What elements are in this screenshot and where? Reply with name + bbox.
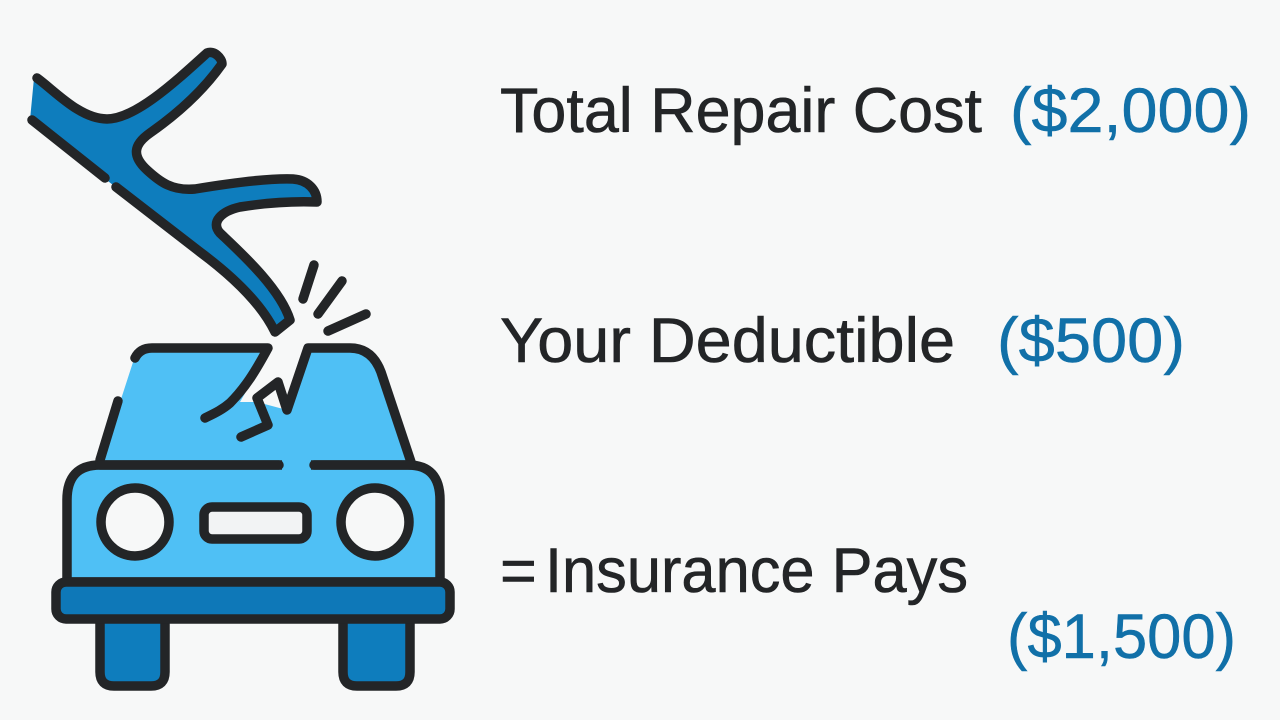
right wheel (343, 618, 410, 686)
icon: damaged car (56, 348, 450, 686)
car windshield (100, 348, 412, 464)
grille (204, 507, 307, 539)
value: repair cost amount: ($2,000) (1010, 76, 1251, 146)
value: deductible amount: ($500) (997, 306, 1185, 376)
text: insurance pays: Insurance Pays (545, 536, 968, 606)
icon: fallen tree branch (30, 52, 317, 332)
car body (67, 465, 440, 582)
bumper (56, 582, 450, 619)
right headlight (341, 488, 409, 556)
left wheel (100, 618, 165, 686)
left headlight (101, 488, 169, 556)
windshield outline (100, 348, 412, 465)
text: your deductible: Your Deductible (500, 306, 955, 376)
text: total repair cost: Total Repair Cost (500, 76, 982, 146)
hood gap (282, 455, 311, 472)
text: insurance pays: = (500, 536, 537, 606)
icon: impact lines (303, 265, 366, 331)
value: insurance payout amount: ($1,500) (1007, 602, 1236, 672)
